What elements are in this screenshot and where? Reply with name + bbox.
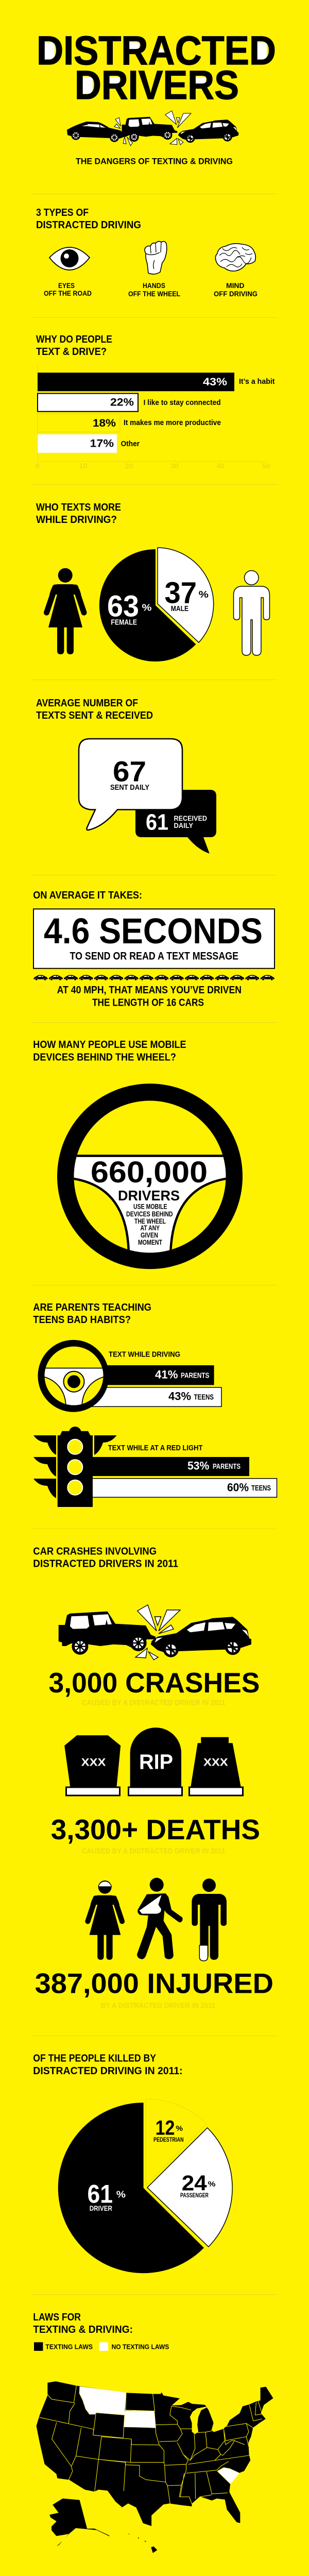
bar: 18 percent: It makes me more productive (124, 419, 221, 427)
bar: 18 percent: 18% (93, 417, 116, 429)
bars: text while driving: 43% (168, 1390, 191, 1403)
heading: 3 TYPES OF (36, 207, 89, 218)
bars: text while driving (88, 1350, 221, 1406)
bar: 18 percent (38, 414, 221, 432)
chart axis: 20 (125, 462, 133, 470)
chart axis: 40 (216, 462, 225, 470)
pie chart: gender: % (199, 589, 209, 600)
heading: HOW MANY PEOPLE USE MOBILE (33, 1039, 186, 1050)
legend: TEXTING LAWS (45, 2343, 93, 2350)
heading: ON AVERAGE IT TAKES: (33, 890, 142, 901)
pie chart: killed: DRIVER (90, 2204, 112, 2212)
bars: text while driving: PARENTS (181, 1371, 210, 1380)
chart axis (36, 364, 270, 470)
callout box: TO SEND OR READ A TEXT MESSAGE (70, 950, 238, 962)
chart axis: 0 (36, 462, 40, 470)
bar: 17 percent (38, 434, 140, 453)
steering wheel (57, 1083, 243, 1269)
speech bubble: sent (79, 739, 182, 830)
speech bubble: received: 61 (146, 810, 168, 835)
bar: 17 percent: Other (121, 440, 140, 448)
stat: deaths: 3,300+ DEATHS (51, 1814, 260, 1845)
icon: man (234, 571, 270, 655)
label: hands (128, 281, 180, 298)
heading (36, 502, 121, 526)
pie chart: gender: % (142, 603, 151, 613)
steering wheel: USE MOBILE (133, 1203, 167, 1211)
bar: 22 percent: 22% (110, 396, 134, 409)
heading: DEVICES BEHIND THE WHEEL? (33, 1052, 176, 1063)
steering wheel: DRIVERS (118, 1188, 180, 1204)
icon: tombstones: XXX (203, 1756, 228, 1768)
label: hands: HANDS (143, 281, 165, 290)
label: mind (214, 281, 258, 298)
heading: DISTRACTED DRIVERS IN 2011 (33, 1558, 178, 1570)
heading (33, 2053, 183, 2077)
stat: deaths: CAUSED BY A DISTRACTED DRIVER IN 2011 (82, 1846, 225, 1855)
steering wheel: AT ANY (140, 1224, 160, 1232)
callout box: 4.6 SECONDS (44, 911, 263, 951)
map: united states (36, 2381, 273, 2553)
heading: TEXTING & DRIVING: (33, 2324, 133, 2335)
bars: text at a red light (92, 1444, 277, 1497)
bars: text at a red light: 60% (227, 1481, 249, 1494)
bars: text while driving: TEXT WHILE DRIVING (109, 1350, 180, 1359)
heading (33, 1546, 178, 1570)
stat: crashes: CAUSED BY A DISTRACTED DRIVER IN 2011 (82, 1698, 225, 1707)
label: eyes (44, 281, 92, 297)
heading: TEENS BAD HABITS? (33, 1314, 131, 1326)
panel: car crashes (33, 1546, 273, 2010)
pie chart: gender: MALE (171, 604, 188, 613)
legend: NO TEXTING LAWS (112, 2343, 169, 2350)
bar: 43 percent: 43% (203, 376, 227, 388)
label: mind: MIND (226, 281, 244, 290)
callout box (33, 909, 274, 969)
steering wheel: GIVEN (141, 1231, 158, 1239)
heading: DISTRACTED DRIVING IN 2011: (33, 2065, 183, 2077)
icon: woman (46, 568, 84, 654)
icon row: 16 cars (33, 975, 274, 980)
heading: ARE PARENTS TEACHING (33, 1302, 151, 1313)
panel: why do people text and drive (36, 334, 275, 470)
label: eyes: OFF THE ROAD (44, 289, 92, 297)
caption (57, 985, 242, 1008)
pie chart: killed: % (176, 2124, 183, 2133)
speech bubble: received (135, 790, 216, 854)
bar: 22 percent: I like to stay connected (144, 399, 221, 407)
pie chart: killed: PEDESTRIAN (153, 2136, 184, 2143)
panel: 4.6 seconds (33, 890, 274, 1008)
speech bubble: sent: 67 (113, 755, 146, 788)
icon: small steering wheel (38, 1340, 109, 1412)
icon: header car crash (67, 111, 238, 146)
panel: people killed (33, 2053, 232, 2273)
pie chart: gender (99, 548, 214, 662)
subtitle: THE DANGERS OF TEXTING & DRIVING (76, 157, 233, 166)
bar: 43 percent: It’s a habit (239, 378, 275, 386)
label: hands: OFF THE WHEEL (128, 290, 180, 298)
title: DISTRACTED (37, 28, 276, 73)
heading: LAWS FOR (33, 2312, 81, 2323)
chart axis: 30 (170, 462, 179, 470)
title (37, 28, 276, 108)
heading: DISTRACTED DRIVING (36, 219, 141, 231)
icon: brain (215, 244, 255, 271)
pie chart: gender: 63 (107, 590, 139, 623)
panel: who texts more (36, 502, 270, 662)
panel: laws (33, 2312, 273, 2553)
steering wheel: DEVICES BEHIND (126, 1210, 173, 1218)
heading: WHO TEXTS MORE (36, 502, 121, 513)
title: DRIVERS (75, 62, 239, 108)
label: mind: OFF DRIVING (214, 290, 258, 298)
legend (34, 2342, 169, 2351)
heading (33, 2312, 133, 2335)
pie chart: killed (58, 2099, 232, 2273)
steering wheel: THE WHEEL (134, 1217, 166, 1225)
speech bubble: sent: SENT DAILY (110, 784, 149, 792)
heading: TEXTS SENT & RECEIVED (36, 710, 153, 721)
caption: AT 40 MPH, THAT MEANS YOU’VE DRIVEN (57, 985, 242, 996)
label: eyes: EYES (58, 281, 75, 290)
stat: injured: 387,000 INJURED (35, 1967, 273, 1999)
bars: text while driving: 41% (155, 1368, 178, 1381)
bars: text while driving: TEENS (194, 1394, 214, 1402)
heading: TEXT & DRIVE? (36, 346, 107, 358)
bar: 43 percent (38, 372, 275, 391)
pie chart: gender: FEMALE (111, 618, 137, 627)
heading (36, 207, 141, 231)
stat: crashes: 3,000 CRASHES (48, 1667, 260, 1699)
icon: fist (145, 241, 167, 274)
chart axis: 50 (262, 462, 270, 470)
heading (36, 698, 153, 721)
icon: large car crash (59, 1605, 251, 1660)
pie chart: killed: 61 (88, 2180, 113, 2209)
pie chart: killed: 24 (182, 2171, 207, 2195)
panel: mobile devices behind the wheel (33, 1039, 243, 1269)
pie chart: killed: % (116, 2190, 126, 2200)
pie chart: gender: 37 (165, 577, 197, 610)
icon: eye (49, 247, 90, 270)
chart axis: 10 (79, 462, 88, 470)
speech bubble: received: DAILY (174, 821, 194, 829)
heading: WHY DO PEOPLE (36, 334, 112, 345)
speech bubble: received: RECEIVED (174, 814, 207, 822)
heading: WHILE DRIVING? (36, 514, 117, 526)
heading (33, 1039, 186, 1063)
bars: text at a red light: TEENS (251, 1484, 271, 1493)
steering wheel: MOMENT (138, 1239, 163, 1246)
pie chart: killed: PASSENGER (180, 2192, 209, 2199)
panel: average number of texts (36, 698, 216, 854)
bar: 17 percent: 17% (90, 437, 114, 450)
icon: tombstones: RIP (139, 1750, 173, 1773)
caption: THE LENGTH OF 16 CARS (92, 997, 204, 1008)
icon: traffic light (33, 1427, 116, 1507)
bars: text at a red light: 53% (187, 1460, 209, 1472)
bar: 22 percent (38, 394, 221, 412)
bars: text at a red light: TEXT WHILE AT A RED LIGHT (108, 1444, 203, 1452)
heading: OF THE PEOPLE KILLED BY (33, 2053, 157, 2064)
icon: injured people (88, 1878, 227, 1961)
panel: 3 types of distracted driving (36, 207, 258, 298)
heading (36, 334, 112, 358)
pie chart: killed: % (208, 2180, 216, 2189)
heading: AVERAGE NUMBER OF (36, 698, 138, 709)
steering wheel: 660,000 (91, 1156, 208, 1189)
panel: parents and teens (33, 1302, 277, 1507)
icon: tombstones: XXX (81, 1756, 106, 1768)
pie chart: killed: 12 (156, 2116, 175, 2139)
heading (33, 1302, 151, 1326)
heading: CAR CRASHES INVOLVING (33, 1546, 157, 1557)
stat: injured: BY A DISTRACTED DRIVER IN 2011 (101, 2001, 215, 2010)
icon: tombstones (64, 1727, 243, 1795)
bars: text at a red light: PARENTS (213, 1463, 241, 1471)
